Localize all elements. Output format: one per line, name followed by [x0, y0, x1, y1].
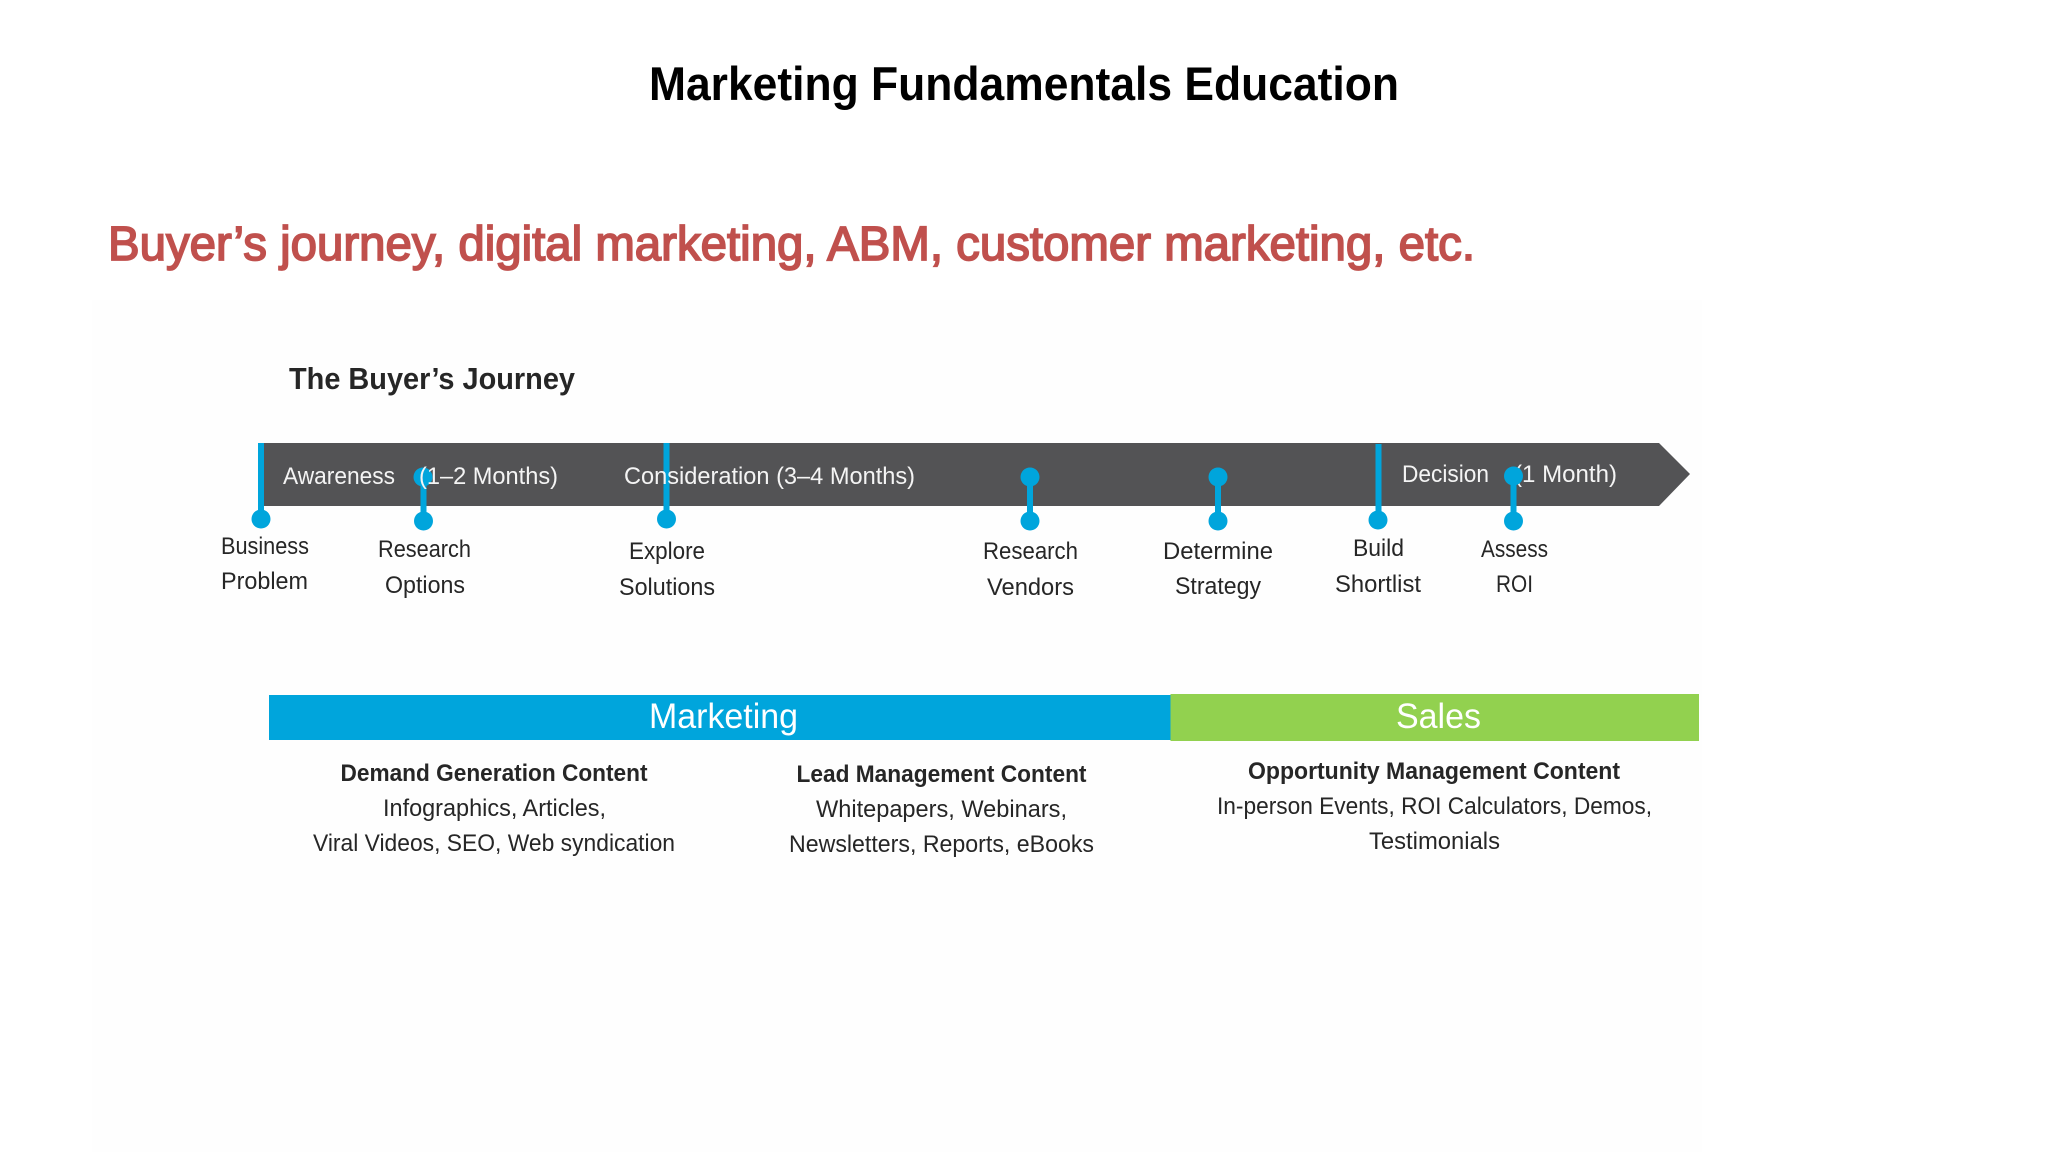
stage label: decision: (1 Month) — [1514, 461, 1617, 488]
stage marker: research options: Options — [385, 572, 465, 599]
stage marker: build shortlist: Build — [1353, 535, 1404, 562]
heading: the buyer's journey: The Buyer’s Journey — [289, 361, 576, 396]
demand generation content — [313, 760, 675, 857]
lead management content: Newsletters, Reports, eBooks — [789, 831, 1094, 858]
panel: sales — [1170, 694, 1699, 855]
opportunity management content — [1217, 758, 1652, 855]
stage marker: business problem — [221, 443, 309, 595]
stage marker: determine strategy: Determine — [1163, 538, 1273, 565]
demand generation content: Viral Videos, SEO, Web syndication — [313, 830, 675, 857]
opportunity management content: Opportunity Management Content — [1248, 758, 1620, 785]
stage marker: explore solutions — [619, 443, 715, 601]
demand generation content: Demand Generation Content — [340, 760, 648, 787]
stage label: awareness: Awareness — [283, 463, 395, 490]
marketing header bar: Marketing — [649, 697, 798, 736]
stage label: decision: Decision — [1402, 461, 1489, 488]
stage marker: research options — [378, 468, 471, 599]
panel: marketing — [269, 695, 1171, 858]
stage marker: assess roi — [1481, 466, 1548, 598]
stage marker: determine strategy — [1163, 468, 1273, 600]
marketing header bar — [269, 695, 1171, 740]
lead management content: Whitepapers, Webinars, — [816, 796, 1067, 823]
stage label: consideration: Consideration (3–4 Months) — [624, 463, 915, 490]
stage marker: research vendors — [983, 468, 1078, 601]
lead management content — [789, 761, 1094, 858]
sales header bar — [1170, 694, 1699, 741]
stage marker: explore solutions: Solutions — [619, 574, 715, 601]
title: Marketing Fundamentals Education — [649, 57, 1399, 110]
demand generation content: Infographics, Articles, — [383, 795, 606, 822]
stage marker: assess roi: Assess — [1481, 536, 1548, 563]
stage marker: business problem: Problem — [221, 568, 308, 595]
stage marker: research options: Research — [378, 536, 471, 563]
stage marker: business problem: Business — [221, 533, 309, 560]
lead management content: Lead Management Content — [796, 761, 1086, 788]
opportunity management content: In-person Events, ROI Calculators, Demos, — [1217, 793, 1652, 820]
stage marker: explore solutions: Explore — [629, 538, 705, 565]
stage marker: research vendors: Vendors — [987, 574, 1074, 601]
panel: journey timeline — [221, 443, 1690, 601]
arrow band — [261, 443, 1690, 506]
stage marker: determine strategy: Strategy — [1175, 573, 1261, 600]
opportunity management content: Testimonials — [1369, 828, 1500, 855]
stage marker: assess roi: ROI — [1496, 571, 1533, 598]
stage label: decision — [1402, 461, 1617, 488]
stage label: awareness — [283, 463, 558, 490]
stage marker: build shortlist: Shortlist — [1335, 571, 1421, 598]
subtitle: Buyer’s journey, digital marketing, ABM, customer marketing, etc. — [108, 218, 1475, 271]
stage label: awareness: (1–2 Months) — [419, 463, 558, 490]
stage marker: research vendors: Research — [983, 538, 1078, 565]
sales header bar: Sales — [1396, 697, 1481, 736]
stage marker: build shortlist — [1335, 444, 1421, 598]
